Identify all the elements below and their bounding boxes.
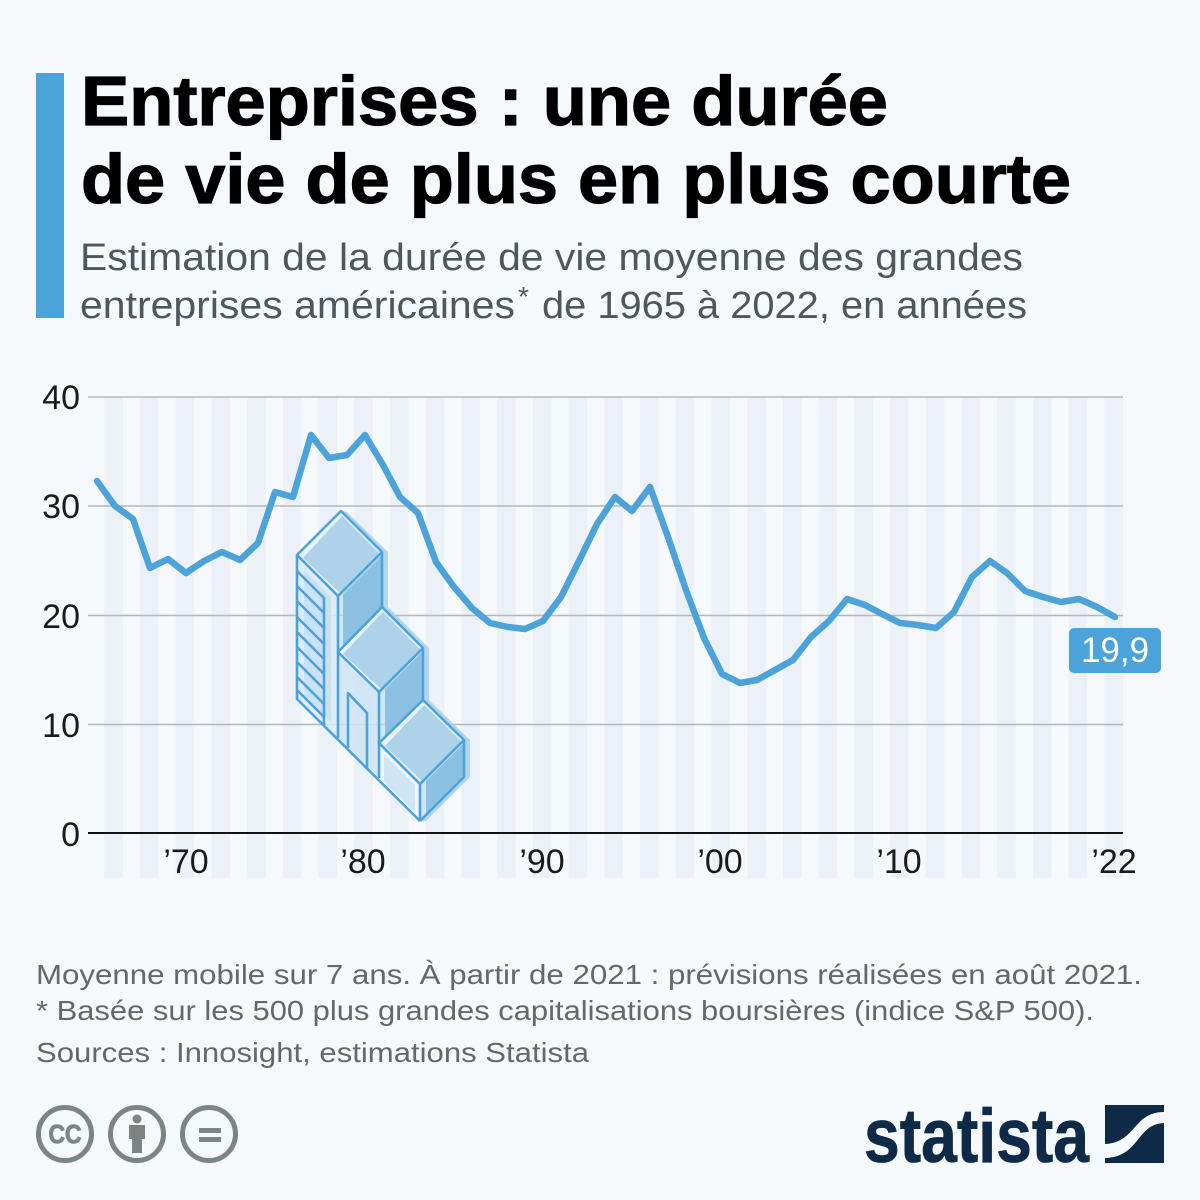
subtitle: de 1965 à 2022, en années bbox=[542, 285, 1027, 327]
title bbox=[81, 62, 1071, 218]
icon: attribution bbox=[110, 1108, 164, 1160]
building shadow bbox=[341, 511, 470, 821]
x axis labels: ’80 bbox=[340, 843, 386, 881]
y axis labels: 0 bbox=[61, 816, 80, 854]
x axis labels: ’90 bbox=[519, 843, 565, 881]
title: Entreprises : une durée bbox=[81, 62, 888, 140]
footnotes: * Basée sur les 500 plus grandes capitalisations boursières (indice S&P 500). bbox=[36, 995, 1094, 1026]
subtitle: entreprises américaines bbox=[80, 285, 515, 327]
icon: no derivatives bbox=[182, 1108, 236, 1160]
x axis line bbox=[88, 832, 1123, 834]
x axis labels: ’00 bbox=[697, 843, 743, 881]
logo mark bbox=[1105, 1105, 1164, 1163]
wordmark: statista bbox=[864, 1094, 1090, 1179]
footnotes: Moyenne mobile sur 7 ans. À partir de 2021 : prévisions réalisées en août 2021. bbox=[36, 959, 1142, 990]
icon: creative commons: CC bbox=[48, 1119, 82, 1149]
y axis labels bbox=[42, 379, 80, 854]
icon: office building bbox=[297, 511, 470, 821]
subtitle bbox=[80, 237, 1027, 327]
chart bbox=[42, 379, 1161, 881]
year stripes bbox=[104, 397, 1123, 878]
statista logo bbox=[864, 1094, 1164, 1179]
title accent bar bbox=[36, 73, 64, 318]
data line bbox=[97, 435, 1115, 683]
x axis labels: ’10 bbox=[876, 843, 922, 881]
value label 19,9: 19,9 bbox=[1081, 631, 1149, 670]
gridlines bbox=[88, 397, 1123, 724]
x axis labels: ’70 bbox=[163, 843, 209, 881]
building faces bbox=[297, 511, 464, 821]
subtitle: Estimation de la durée de vie moyenne des grandes bbox=[80, 237, 1023, 279]
x axis labels bbox=[163, 843, 1137, 881]
subtitle: * bbox=[518, 281, 529, 312]
building outlines bbox=[297, 511, 464, 821]
y axis labels: 30 bbox=[42, 488, 80, 526]
title: de vie de plus en plus courte bbox=[81, 140, 1071, 218]
y axis labels: 20 bbox=[42, 598, 80, 636]
footnotes bbox=[36, 959, 1142, 1068]
footnotes: Sources : Innosight, estimations Statista bbox=[36, 1037, 589, 1068]
value label 19,9 bbox=[1069, 628, 1161, 673]
y axis labels: 10 bbox=[42, 707, 80, 745]
x axis labels: ’22 bbox=[1091, 843, 1137, 881]
icon: creative commons bbox=[38, 1108, 92, 1160]
y axis labels: 40 bbox=[42, 379, 80, 417]
